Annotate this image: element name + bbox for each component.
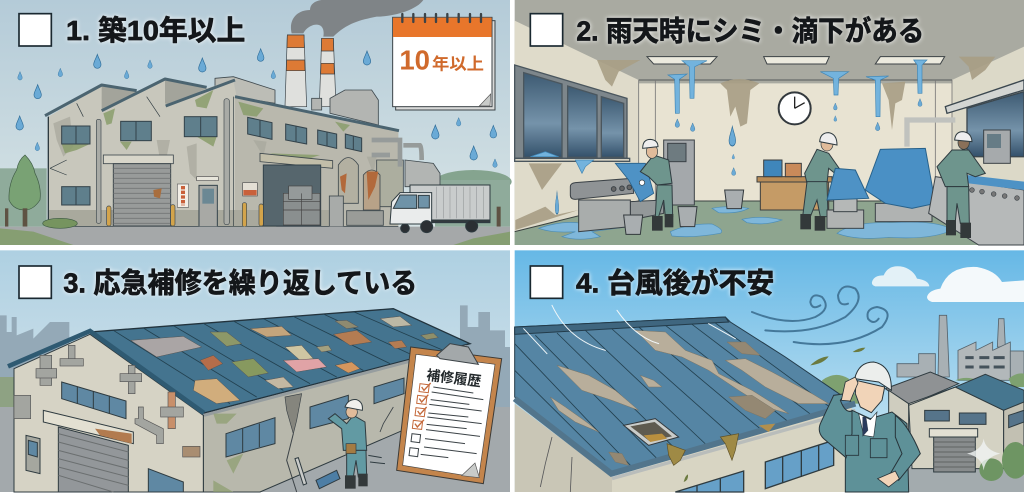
clipboard: repair history (397, 344, 502, 484)
door and sign (177, 177, 257, 227)
water leaks (530, 60, 927, 214)
ceiling and wall stains (515, 57, 995, 230)
loading bay with machinery (260, 153, 333, 226)
heading 3: 3. 応急補修を繰り返している (63, 267, 417, 298)
smoke (291, 0, 423, 37)
chimneys (285, 35, 336, 107)
wall patches (14, 345, 200, 457)
windows and door (26, 378, 404, 492)
worried worker (819, 362, 920, 492)
clouds (872, 266, 1024, 302)
roof patches (131, 316, 438, 404)
puddles (539, 207, 952, 239)
checkbox 3 (19, 266, 51, 298)
heading 2: 2. 雨天時にシミ・滴下がある (576, 15, 924, 47)
building side wall (203, 360, 410, 492)
ground and hedge (822, 373, 1024, 492)
worker centre (800, 133, 840, 231)
peeled rust patches (550, 330, 829, 465)
truck (390, 185, 490, 233)
ceiling lights (647, 57, 945, 64)
left windows with rain (515, 65, 630, 161)
damaged roof (515, 317, 855, 479)
sky and ground (0, 250, 510, 492)
heading 1: 1. 築10年以上 (66, 15, 245, 46)
sky (515, 250, 1024, 492)
panel 3: repeated emergency repairs (0, 250, 510, 492)
windows (62, 117, 362, 205)
heading 4: 4. 台風後が不安 (576, 266, 774, 298)
building front gable wall (14, 334, 203, 492)
right worker and line (929, 130, 1024, 245)
flying leaves (684, 348, 865, 482)
panel 2: stains and drips when raining (515, 0, 1024, 245)
calendar: 10 years or more: 年以上 (432, 53, 484, 73)
left conveyor machine (570, 140, 694, 232)
road and grass (0, 218, 510, 245)
shutter (43, 410, 133, 492)
toolbox and tools (295, 455, 385, 489)
covered machines (827, 148, 935, 228)
desk with blue bucket (757, 160, 832, 210)
calendar: 10 years or more (393, 14, 495, 110)
clock (779, 92, 811, 124)
shutter (103, 155, 173, 226)
gutter debris and vent (624, 419, 775, 465)
downpipes (96, 99, 229, 225)
wall cracks (213, 394, 393, 492)
damaged factory wall (515, 404, 852, 492)
buckets (624, 190, 744, 234)
worker (328, 400, 368, 489)
roof (8, 309, 470, 415)
checklist (409, 383, 483, 458)
checkbox 4 (530, 266, 563, 298)
right windows and duct (907, 80, 1024, 157)
moss (62, 90, 350, 235)
panel 1: building over 10 years old (0, 0, 512, 245)
calendar: 10 years or more: 10 (399, 44, 430, 75)
bushes and sparkle (967, 439, 1024, 481)
yellow bollards (107, 203, 263, 227)
clipboard: repair history: 補修履歴 (426, 367, 482, 389)
room (515, 0, 1024, 245)
neighbouring buildings (885, 372, 1024, 472)
stains (53, 117, 377, 180)
checkbox 2 (530, 14, 563, 46)
rooftop equipment (215, 77, 378, 125)
background trees (0, 155, 512, 227)
factory building (45, 79, 440, 235)
tarp and worker left (615, 139, 673, 231)
wind swirls (524, 286, 888, 354)
rusty tanks and pipes (329, 140, 440, 227)
panel 4: anxiety after typhoon (515, 250, 1024, 492)
checkbox 1 (19, 14, 51, 46)
rain drops (16, 49, 497, 167)
distant factory (897, 315, 1024, 380)
